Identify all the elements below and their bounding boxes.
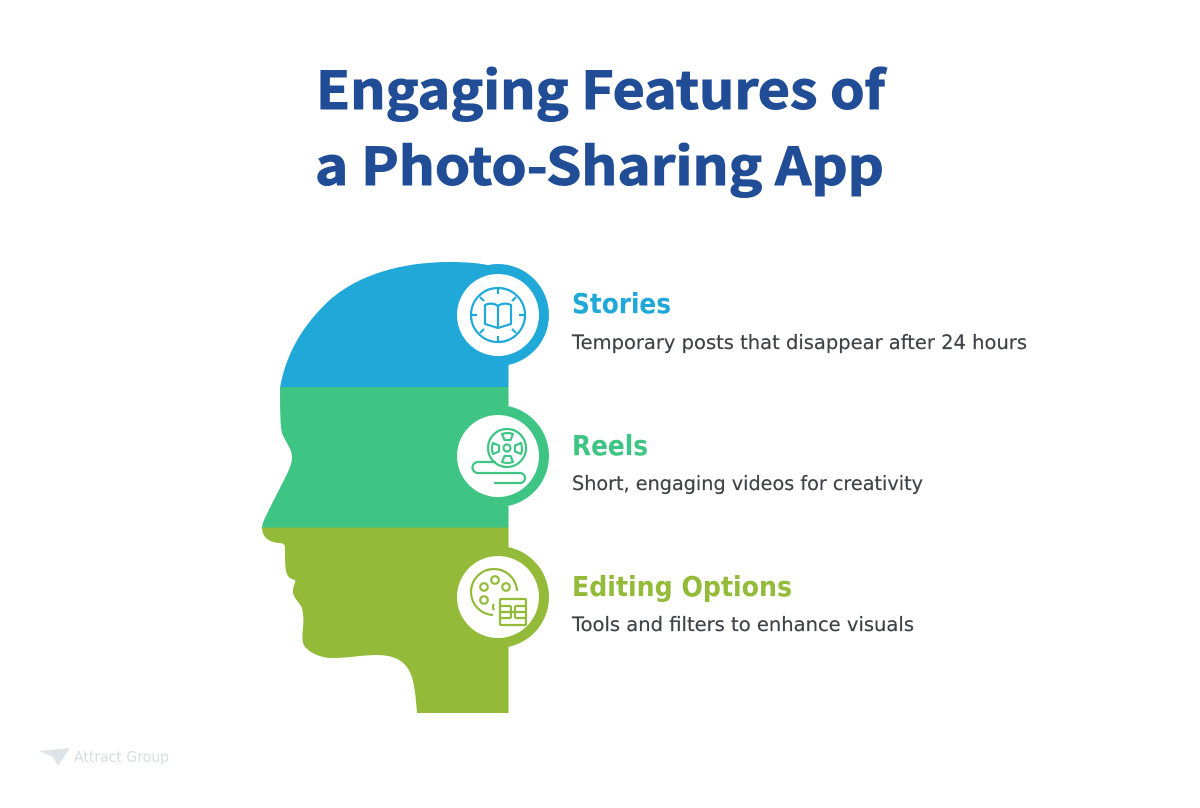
- head silhouette: [262, 262, 549, 713]
- feature: reels: Short, engaging videos for creativity: [572, 472, 923, 495]
- logo: Attract Group: [39, 748, 169, 766]
- icon: palette with editor panel: [457, 556, 539, 638]
- title: a Photo-Sharing App: [315, 125, 884, 200]
- head section: green: [262, 387, 549, 528]
- feature: reels: Reels: [572, 430, 648, 462]
- title: [315, 49, 888, 200]
- icon: book compass: [457, 274, 539, 356]
- feature: stories: [571, 288, 1027, 354]
- feature: reels: [572, 430, 923, 495]
- title: Engaging Features of: [316, 49, 888, 124]
- feature: stories: Temporary posts that disappear after 24 hours: [571, 331, 1027, 354]
- logo: Attract Group: Attract Group: [74, 748, 169, 766]
- icon: film reel: [457, 415, 539, 497]
- feature: editing options: [571, 571, 914, 636]
- feature: editing options: Editing Options: [572, 571, 792, 603]
- icon: paper plane: [39, 748, 70, 766]
- feature: stories: Stories: [572, 288, 671, 320]
- feature: editing options: Tools and filters to enhance visuals: [571, 613, 914, 636]
- head section: blue: [280, 262, 549, 388]
- head section: olive green: [262, 528, 549, 713]
